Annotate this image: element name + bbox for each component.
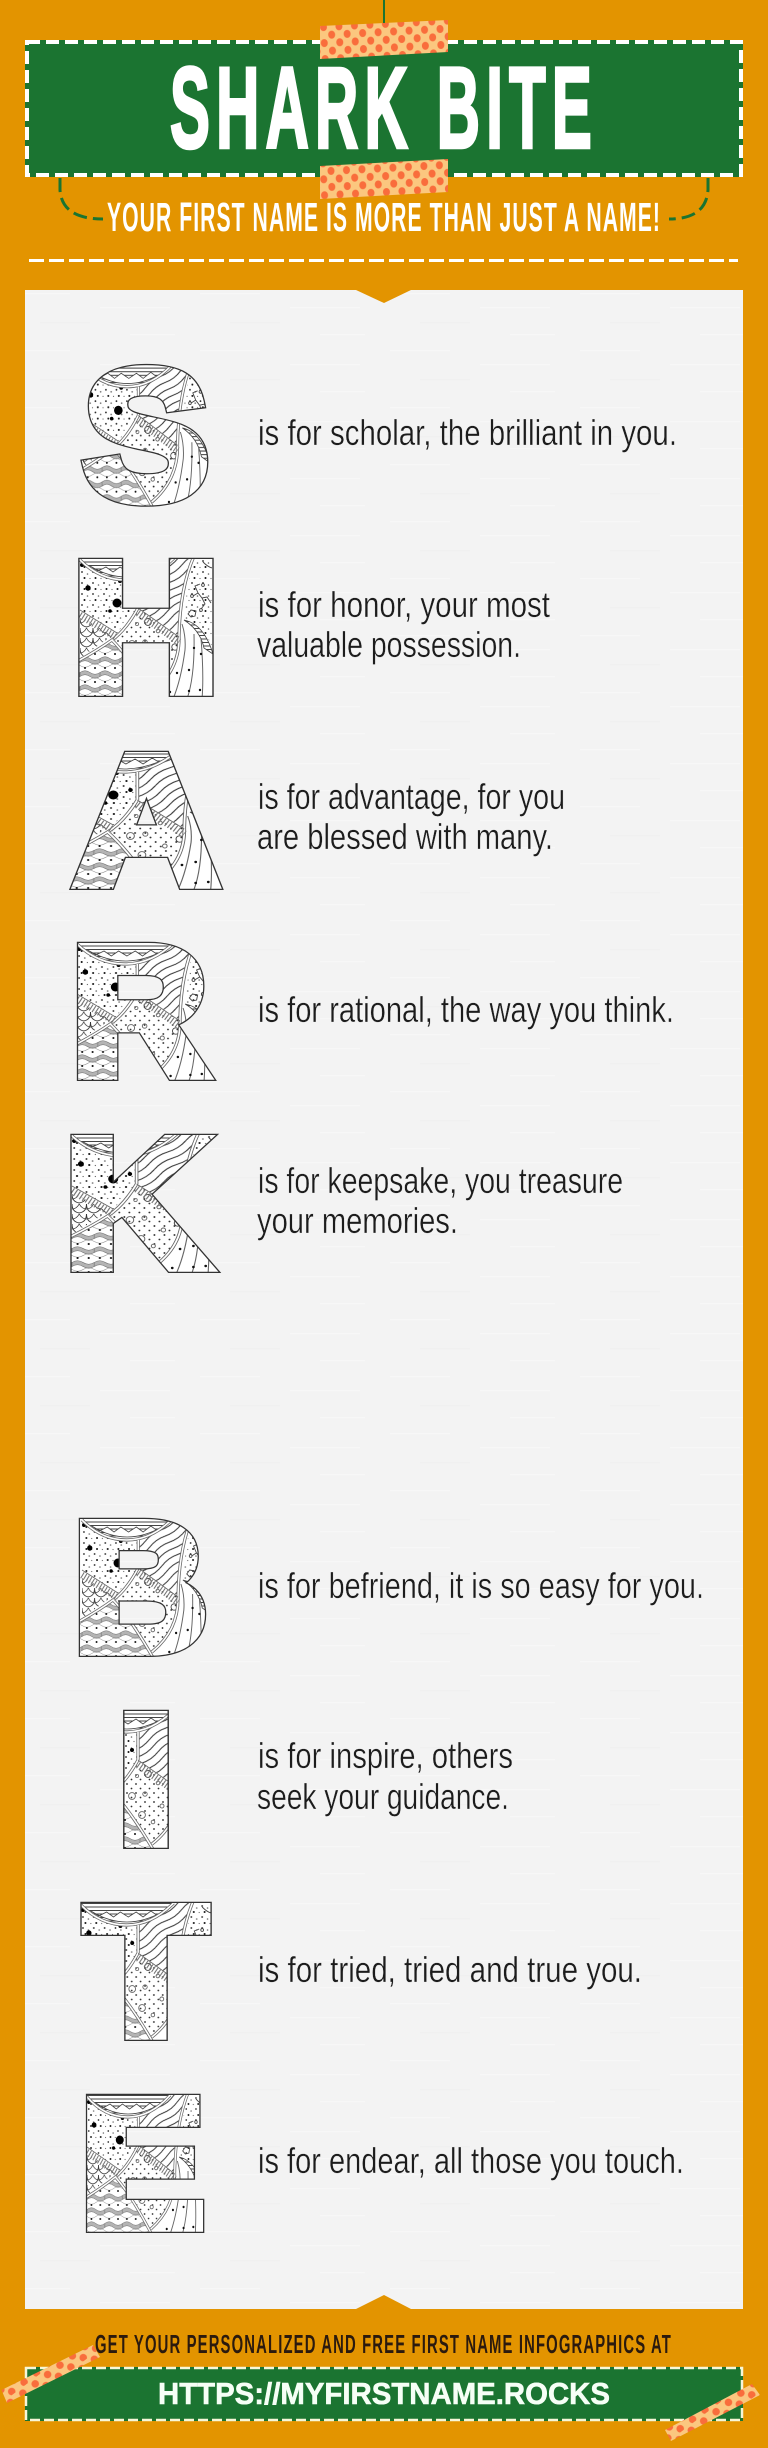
text: I line [257, 1735, 513, 1817]
letter A: A [75, 720, 218, 922]
text: H line [257, 584, 550, 665]
panel: name letters [25, 290, 743, 2309]
text: A line: are blessed with many. [257, 816, 553, 857]
letter K: K [65, 1102, 207, 1305]
letter E [86, 2094, 204, 2233]
letter T [80, 1902, 212, 2041]
letter E: E [81, 2062, 204, 2265]
text: A line: is for advantage, for you [258, 776, 565, 817]
title banner [25, 0, 743, 199]
letter H: H [72, 525, 220, 729]
text: K line: your memories. [257, 1200, 458, 1241]
letter B: B [73, 1486, 208, 1689]
text: A line [257, 776, 565, 857]
text: K line: is for keepsake, you treasure [258, 1160, 623, 1201]
letter R: R [71, 910, 208, 1113]
letter B [78, 1518, 206, 1657]
letter K [70, 1134, 222, 1273]
text: H line: is for honor, your most [258, 584, 550, 625]
letter S [80, 364, 208, 507]
text: R line: is for rational, the way you think. [258, 989, 674, 1030]
letter H [78, 558, 214, 697]
letter R [76, 942, 217, 1081]
text: I line: is for inspire, others [258, 1735, 513, 1776]
footer url: HTTPS://MYFIRSTNAME.ROCKS [158, 2376, 610, 2411]
letter S: S [83, 334, 209, 537]
text: H line: valuable possession. [257, 624, 521, 665]
text: S line: is for scholar, the brilliant in you. [258, 412, 677, 453]
text: K line [257, 1160, 623, 1241]
letter T: T [86, 1870, 206, 2073]
footer banner [2, 2345, 760, 2441]
letter I [123, 1710, 169, 1849]
text: T line: is for tried, tried and true you. [258, 1949, 642, 1990]
subtitle connectors [60, 178, 708, 219]
letter I: I [117, 1678, 175, 1881]
text: I line: seek your guidance. [257, 1776, 509, 1817]
letter A [68, 750, 224, 890]
